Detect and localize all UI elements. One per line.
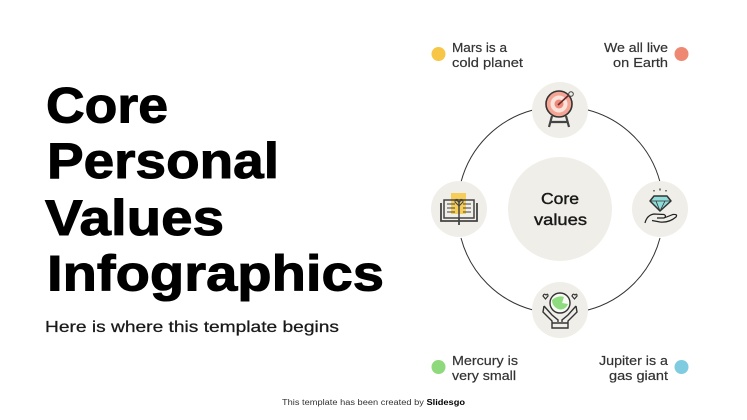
title: Values — [45, 190, 224, 246]
legend: Earth: on Earth — [613, 55, 668, 70]
legend: Mars: cold planet — [452, 55, 523, 70]
title: Core — [46, 78, 168, 134]
legend: Earth: We all live — [604, 40, 668, 55]
center circle — [508, 157, 612, 261]
legend: Mercury: very small — [452, 368, 516, 383]
legend: Mercury: Mercury is — [452, 353, 519, 368]
title — [45, 78, 384, 302]
title: Infographics — [47, 246, 384, 302]
ring connecting the icons — [461, 110, 660, 310]
legend: Earth — [604, 40, 688, 70]
icon: diamond in hand — [632, 181, 688, 237]
legend: Jupiter: Jupiter is a — [599, 353, 669, 368]
legend: Mercury — [432, 353, 519, 383]
subtitle: Here is where this template begins — [45, 319, 339, 336]
icon: hands holding globe — [532, 282, 588, 338]
title: Personal — [47, 133, 279, 189]
center circle: values — [534, 212, 587, 229]
footer credit: This template has been created by Slidesgo — [282, 398, 465, 407]
legend: Mars — [432, 40, 523, 70]
icon: open book — [431, 181, 487, 237]
legend: Jupiter: gas giant — [609, 368, 668, 383]
icon: target — [532, 82, 588, 138]
legend: Jupiter — [599, 353, 688, 383]
legend: Mars: Mars is a — [452, 40, 508, 55]
center circle: Core — [541, 191, 579, 208]
